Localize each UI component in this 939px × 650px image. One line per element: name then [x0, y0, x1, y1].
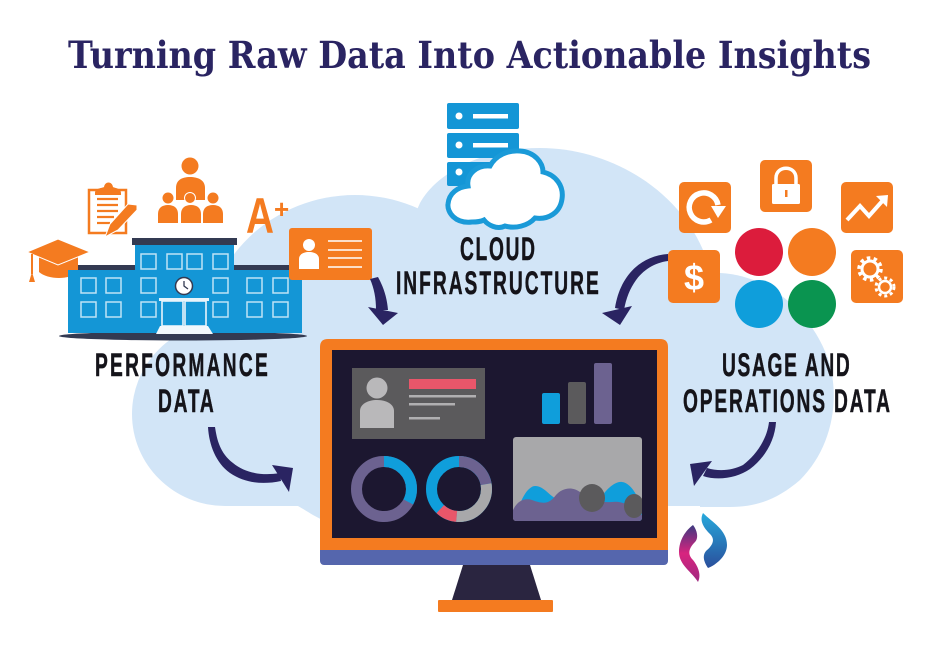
icon: school building: [59, 238, 307, 340]
title: Turning Raw Data Into Actionable Insights: [68, 33, 871, 77]
label: usage and operations data: USAGE AND: [722, 347, 850, 383]
icon: cloud: [448, 151, 562, 227]
donut chart one: [356, 462, 412, 516]
icon: colored circles: [735, 228, 836, 328]
icon: server stack: [447, 103, 519, 186]
label: cloud infrastructure: INFRASTRUCTURE: [396, 265, 599, 301]
profile card: [352, 368, 485, 439]
arrow: usage data to monitor side: [690, 422, 776, 486]
label: usage and operations data: OPERATIONS DATA: [683, 383, 890, 419]
icon: clipboard and pen: [89, 182, 137, 237]
icon: refresh tile: [679, 182, 731, 233]
label: performance data: [95, 347, 268, 419]
monitor stand: [452, 565, 541, 600]
icon: dollar tile: $: [684, 257, 704, 298]
icon: lock tile: [760, 160, 812, 212]
label: performance data: PERFORMANCE: [95, 347, 268, 383]
background cloud: [132, 148, 834, 524]
label: usage and operations data: [683, 347, 890, 419]
donut chart two: [432, 462, 486, 516]
label: cloud infrastructure: [396, 231, 599, 301]
monitor: [320, 339, 668, 612]
arrow: performance data to monitor: [208, 427, 293, 492]
logo mark: [679, 513, 727, 582]
monitor base: [438, 600, 553, 612]
bar chart: [542, 363, 612, 424]
label: performance data: DATA: [158, 383, 214, 419]
icon: graduation cap: [27, 239, 90, 282]
icon: gears tile: [851, 250, 903, 303]
label: cloud infrastructure: CLOUD: [460, 231, 535, 267]
icon: A plus grade: A: [246, 188, 274, 244]
icon: dollar tile: [668, 250, 720, 303]
arrow: id card to monitor: [368, 277, 398, 325]
icon: trend tile: [841, 182, 893, 233]
icon: id card: [289, 228, 372, 280]
arrow: usage data to monitor top: [602, 254, 668, 325]
area chart: [513, 437, 644, 521]
icon: teacher and students: [158, 158, 223, 223]
icon: A plus grade: +: [274, 194, 289, 224]
